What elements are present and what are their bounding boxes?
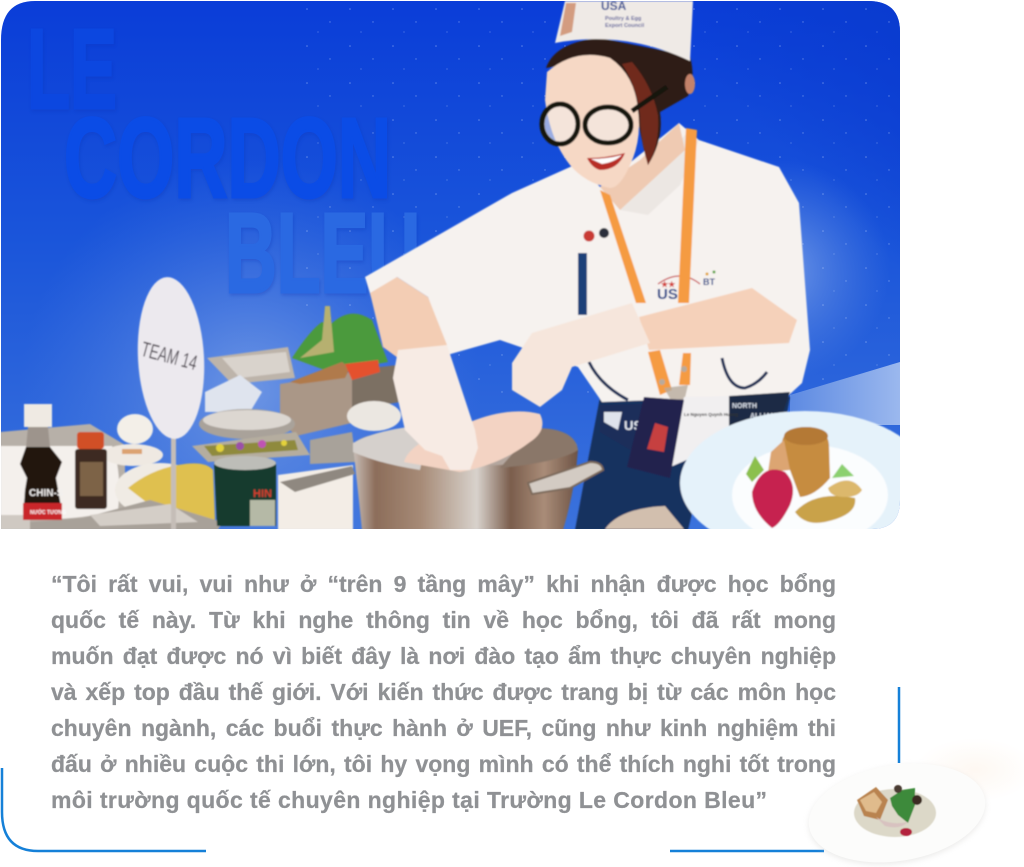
blue gradient background	[0, 0, 900, 530]
can	[214, 456, 276, 526]
quote text: quốc tế này. Từ khi nghe thông tin về học bổng, tôi đã rất mong	[51, 607, 836, 633]
chef head and hair	[545, 38, 695, 188]
left glove	[393, 345, 478, 470]
usa logo on jacket: BT	[703, 277, 715, 287]
competition badge: ALLIANCE	[750, 413, 786, 420]
quote text	[51, 571, 836, 814]
spice jar	[75, 432, 107, 509]
quote text: môi trường quốc tế chuyên nghiệp tại Trường Le Cordon Bleu”	[51, 787, 767, 813]
glasses	[542, 87, 667, 144]
embossed title: Le Cordon Bleu: BLEU	[226, 192, 421, 318]
team 14 sign: TEAM 14	[139, 338, 200, 375]
usa logo on jacket: ★★	[661, 280, 676, 289]
table with plates, noodles and trays	[0, 414, 355, 530]
quote text: “Tôi rất vui, vui như ở “trên 9 tầng mây” khi nhận được học bổng	[51, 571, 836, 597]
metal pole	[171, 420, 176, 530]
apron logo band: US	[624, 418, 642, 433]
quote text: muốn đạt được nó vì biết đây là nơi đào tạo ẩm thực chuyên nghiệp	[51, 643, 836, 669]
paper chef hat: Export Council	[605, 23, 645, 29]
apron logo band	[602, 410, 640, 432]
can: HIN	[253, 488, 272, 500]
left forearm	[370, 277, 447, 358]
competition badge	[627, 392, 790, 478]
chef jacket	[365, 123, 810, 402]
embossed title: Le Cordon Bleu: LE	[28, 8, 118, 134]
quote text: đấu ở nhiều cuộc thi lớn, tôi hy vọng mình có thể thích nghi tốt trong	[51, 751, 836, 777]
soy sauce bottle: NƯỚC TƯƠNG	[30, 508, 66, 516]
embossed title: Le Cordon Bleu	[34, 44, 417, 296]
right forearm	[639, 288, 797, 350]
back of the cooking station: steel trays and greens	[192, 306, 401, 464]
jacket details	[578, 135, 767, 400]
paper chef hat: Poultry & Egg	[605, 16, 641, 22]
hero photo panel	[1, 1, 900, 529]
embossed title: Le Cordon Bleu: CORDON	[64, 95, 391, 221]
lanyard clips	[659, 366, 688, 402]
competition badge: Le Nguyen Quynh Huong	[684, 412, 738, 417]
usa logo on jacket: USA	[657, 286, 689, 303]
embossed title: Le Cordon Bleu: CORDON	[65, 97, 392, 223]
usa logo on jacket	[657, 270, 716, 303]
embossed title: Le Cordon Bleu: BLEU	[225, 190, 420, 316]
paper chef hat	[555, 0, 693, 61]
soy sauce bottle: CHIN-S	[29, 488, 64, 499]
plated dessert	[680, 411, 930, 555]
cooking pot	[353, 425, 603, 530]
chef trousers and apron	[575, 397, 790, 530]
photo content	[0, 0, 930, 555]
neck	[600, 123, 685, 210]
competition badge: NORTH	[732, 403, 757, 410]
bowl rim at the bottom	[605, 506, 684, 529]
small plated dish	[802, 738, 1024, 867]
orange lanyard	[600, 128, 697, 395]
team 14 sign	[134, 275, 208, 441]
embossed title: Le Cordon Bleu: LE	[27, 6, 117, 132]
quote text: chuyên ngành, các buổi thực hành ở UEF, cũng như kinh nghiệm thi	[51, 715, 836, 741]
chicken	[404, 411, 542, 472]
quote text: và xếp top đầu thế giới. Với kiến thức được trang bị từ các môn học	[51, 679, 836, 705]
right glove	[512, 303, 650, 407]
soy sauce bottle	[20, 404, 66, 520]
